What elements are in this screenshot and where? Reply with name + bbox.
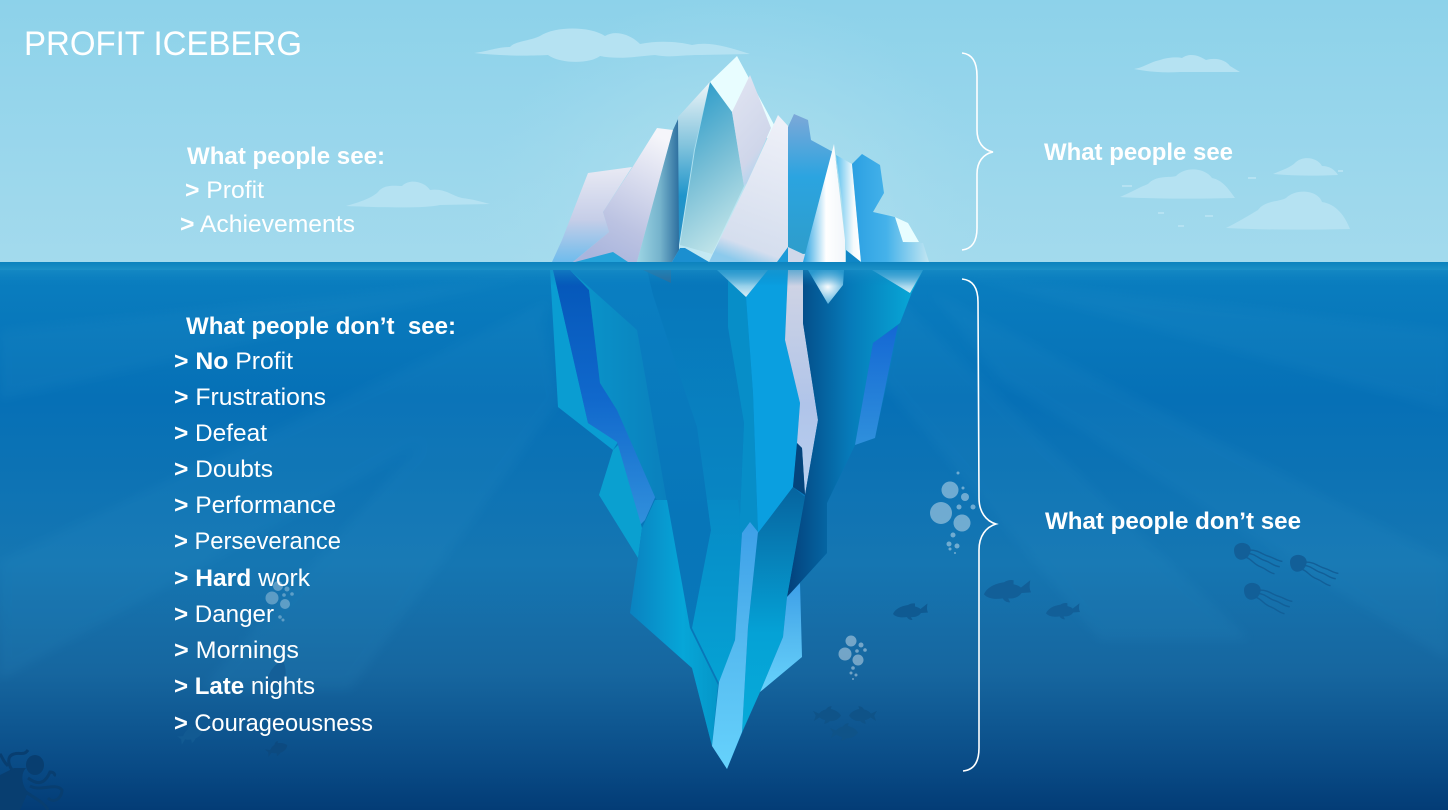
light rays in the water — [0, 275, 1448, 690]
middle teal strip — [728, 270, 758, 537]
fish school 2 — [849, 706, 877, 724]
heading: what people see: What people see: — [187, 143, 385, 170]
water surface fade — [0, 270, 1448, 286]
brace: what people don't see — [962, 279, 996, 771]
bright blue facet — [746, 270, 800, 533]
fish: bottom — [264, 738, 290, 759]
dark teal face — [637, 117, 679, 262]
small base facets — [777, 247, 788, 262]
item: late nights: > Late nights — [174, 673, 315, 700]
label: what people don't see: What people don’t see — [1045, 508, 1301, 535]
jellyfish 3 — [1244, 583, 1292, 614]
item: perseverance: > Perseverance — [174, 528, 341, 555]
reflection: triangle 3 — [872, 270, 923, 293]
bubbles: right — [930, 472, 976, 554]
jellyfish 2 — [1290, 555, 1338, 586]
cloud: top right — [1134, 55, 1240, 72]
light right panel — [760, 583, 802, 692]
white peak — [708, 56, 778, 140]
reflection: triangle 2 — [808, 270, 844, 304]
fish: left of brace — [893, 603, 928, 620]
jellyfish 1 — [1234, 543, 1282, 574]
cloud: right small — [1273, 158, 1338, 176]
heading: what people don't see: What people don’t see: — [186, 313, 456, 340]
bubbles: behind list — [266, 581, 294, 622]
right blue mass — [852, 154, 929, 262]
lower middle column — [692, 500, 742, 683]
item: profit: > Profit — [185, 177, 264, 204]
item: hard work: > Hard work — [174, 565, 311, 592]
right white facet — [873, 207, 919, 242]
cloud: left of iceberg — [346, 182, 490, 207]
tall column — [678, 82, 710, 245]
item: achievements: > Achievements — [180, 211, 355, 238]
cyan left strip — [550, 270, 618, 450]
second slab — [573, 128, 673, 262]
base blue wedge — [672, 248, 709, 262]
fish: medium centre — [1046, 603, 1080, 619]
teal panel — [570, 270, 670, 520]
fish: behind Courageousness — [175, 721, 207, 748]
water surface band — [0, 262, 1448, 270]
item: mornings: > Mornings — [174, 637, 299, 664]
lower-left column — [630, 500, 718, 746]
far left slab — [552, 167, 632, 262]
ocean background — [0, 262, 1448, 810]
cyan lower-left facet — [599, 445, 642, 558]
text block: what people don't see list — [174, 313, 456, 737]
blue mid facet — [788, 114, 845, 254]
sky background — [0, 0, 1448, 263]
small cyan base — [575, 252, 628, 262]
base dark blue — [846, 250, 861, 262]
item: frustrations: > Frustrations — [174, 384, 326, 411]
faint middle panel — [647, 270, 744, 537]
item: doubts: > Doubts — [174, 456, 273, 483]
label: what people see: What people see — [1044, 139, 1233, 166]
fish: behind Late nights — [264, 661, 286, 695]
deep blue strip — [553, 270, 657, 525]
fish school 1 — [813, 706, 841, 724]
clouds — [346, 28, 1350, 230]
reflection: triangle 1 — [717, 270, 768, 297]
cloud: top centre — [474, 28, 750, 62]
blue right strip — [855, 325, 898, 445]
cloud: right medium — [1120, 169, 1235, 199]
iceberg below water — [550, 270, 923, 769]
title: PROFIT ICEBERG — [24, 25, 302, 63]
dark notch — [793, 443, 805, 495]
iceberg above water — [552, 56, 929, 262]
large lavender facet — [709, 115, 789, 262]
pale strip — [836, 155, 861, 262]
lavender crack — [785, 270, 818, 495]
item: defeat: > Defeat — [174, 420, 267, 447]
item: no profit: > No Profit — [174, 348, 293, 375]
fish school 3 — [830, 723, 858, 741]
light blue column — [712, 522, 758, 769]
sky glow behind iceberg — [440, 0, 1040, 263]
cloud: right large — [1226, 192, 1350, 230]
body — [552, 270, 923, 769]
small cloud specks — [1122, 170, 1343, 227]
reflection: dark triangle — [643, 270, 671, 283]
rear lavender facet — [732, 75, 771, 186]
brace: what people see — [962, 53, 993, 250]
sea life silhouettes — [0, 543, 1338, 810]
white spike — [803, 144, 845, 262]
dark right panel — [787, 270, 923, 597]
octopus — [0, 750, 62, 810]
item: performance: > Performance — [174, 492, 336, 519]
item: courageousness: > Courageousness — [174, 710, 373, 737]
dark lower middle — [742, 487, 805, 732]
central teal facet — [680, 82, 744, 254]
fish: large right — [984, 580, 1031, 602]
item: danger: > Danger — [174, 601, 274, 628]
text block: what people see list — [180, 143, 385, 238]
bubbles: centre — [838, 636, 867, 680]
